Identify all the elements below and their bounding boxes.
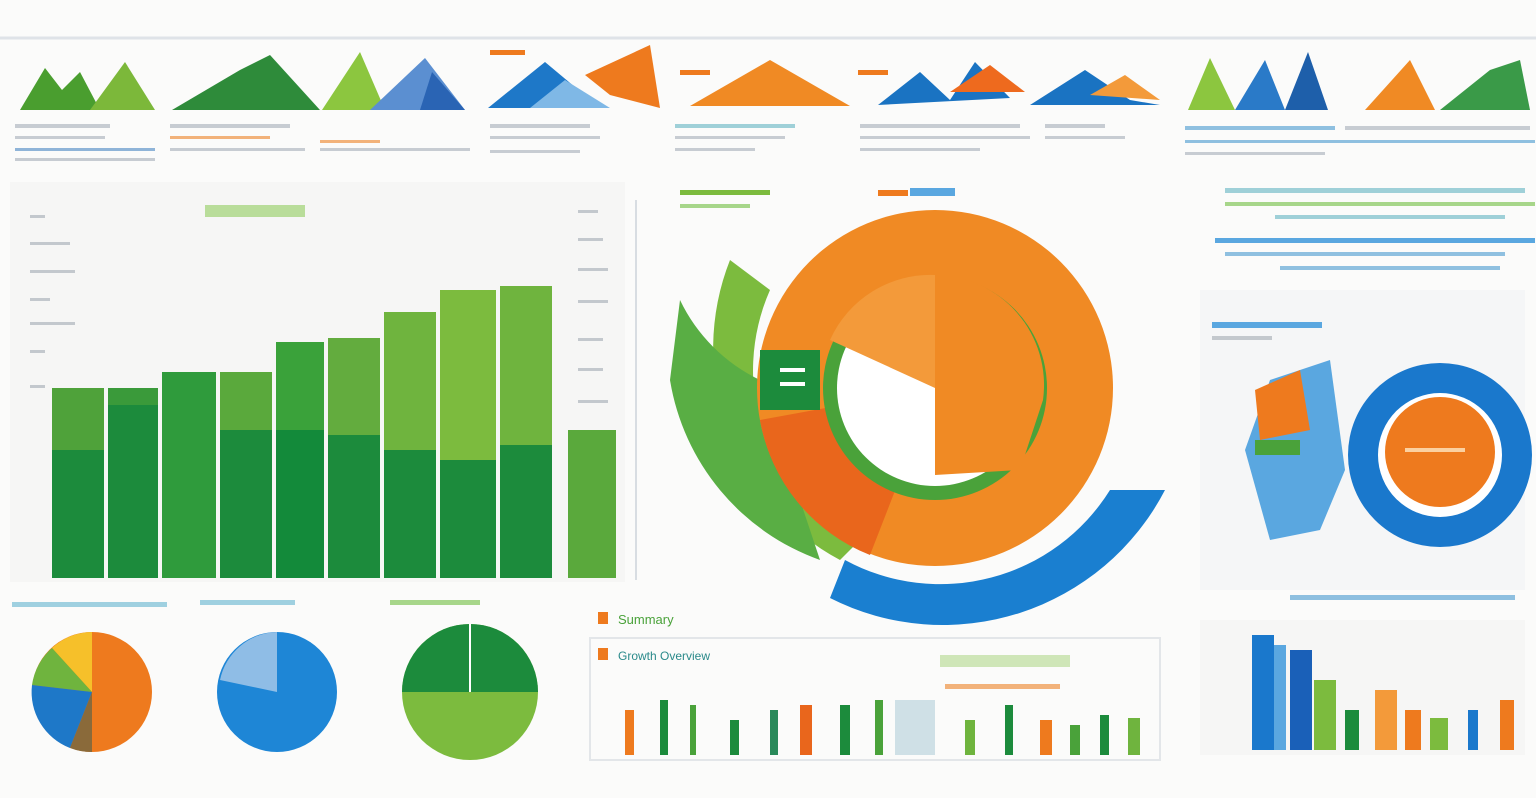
bottom captions left bbox=[12, 600, 480, 607]
pie 1 bbox=[32, 632, 152, 752]
bars bbox=[52, 286, 552, 578]
right text block bbox=[1215, 188, 1535, 270]
bottom middle bar chart: Growth Overview bbox=[618, 649, 710, 663]
bottom middle bar chart: Summary bbox=[618, 612, 674, 627]
center donut chart bbox=[670, 188, 1165, 625]
pie 2 bbox=[217, 632, 337, 752]
bottom right bar chart bbox=[1200, 620, 1525, 755]
panel: right donut bbox=[1200, 290, 1532, 600]
bottom middle bar chart bbox=[590, 612, 1160, 760]
top row mountain charts bbox=[20, 45, 1530, 110]
pie 3 bbox=[402, 624, 538, 760]
top caption lines bbox=[15, 124, 1535, 161]
panel: bar chart bbox=[10, 182, 636, 582]
